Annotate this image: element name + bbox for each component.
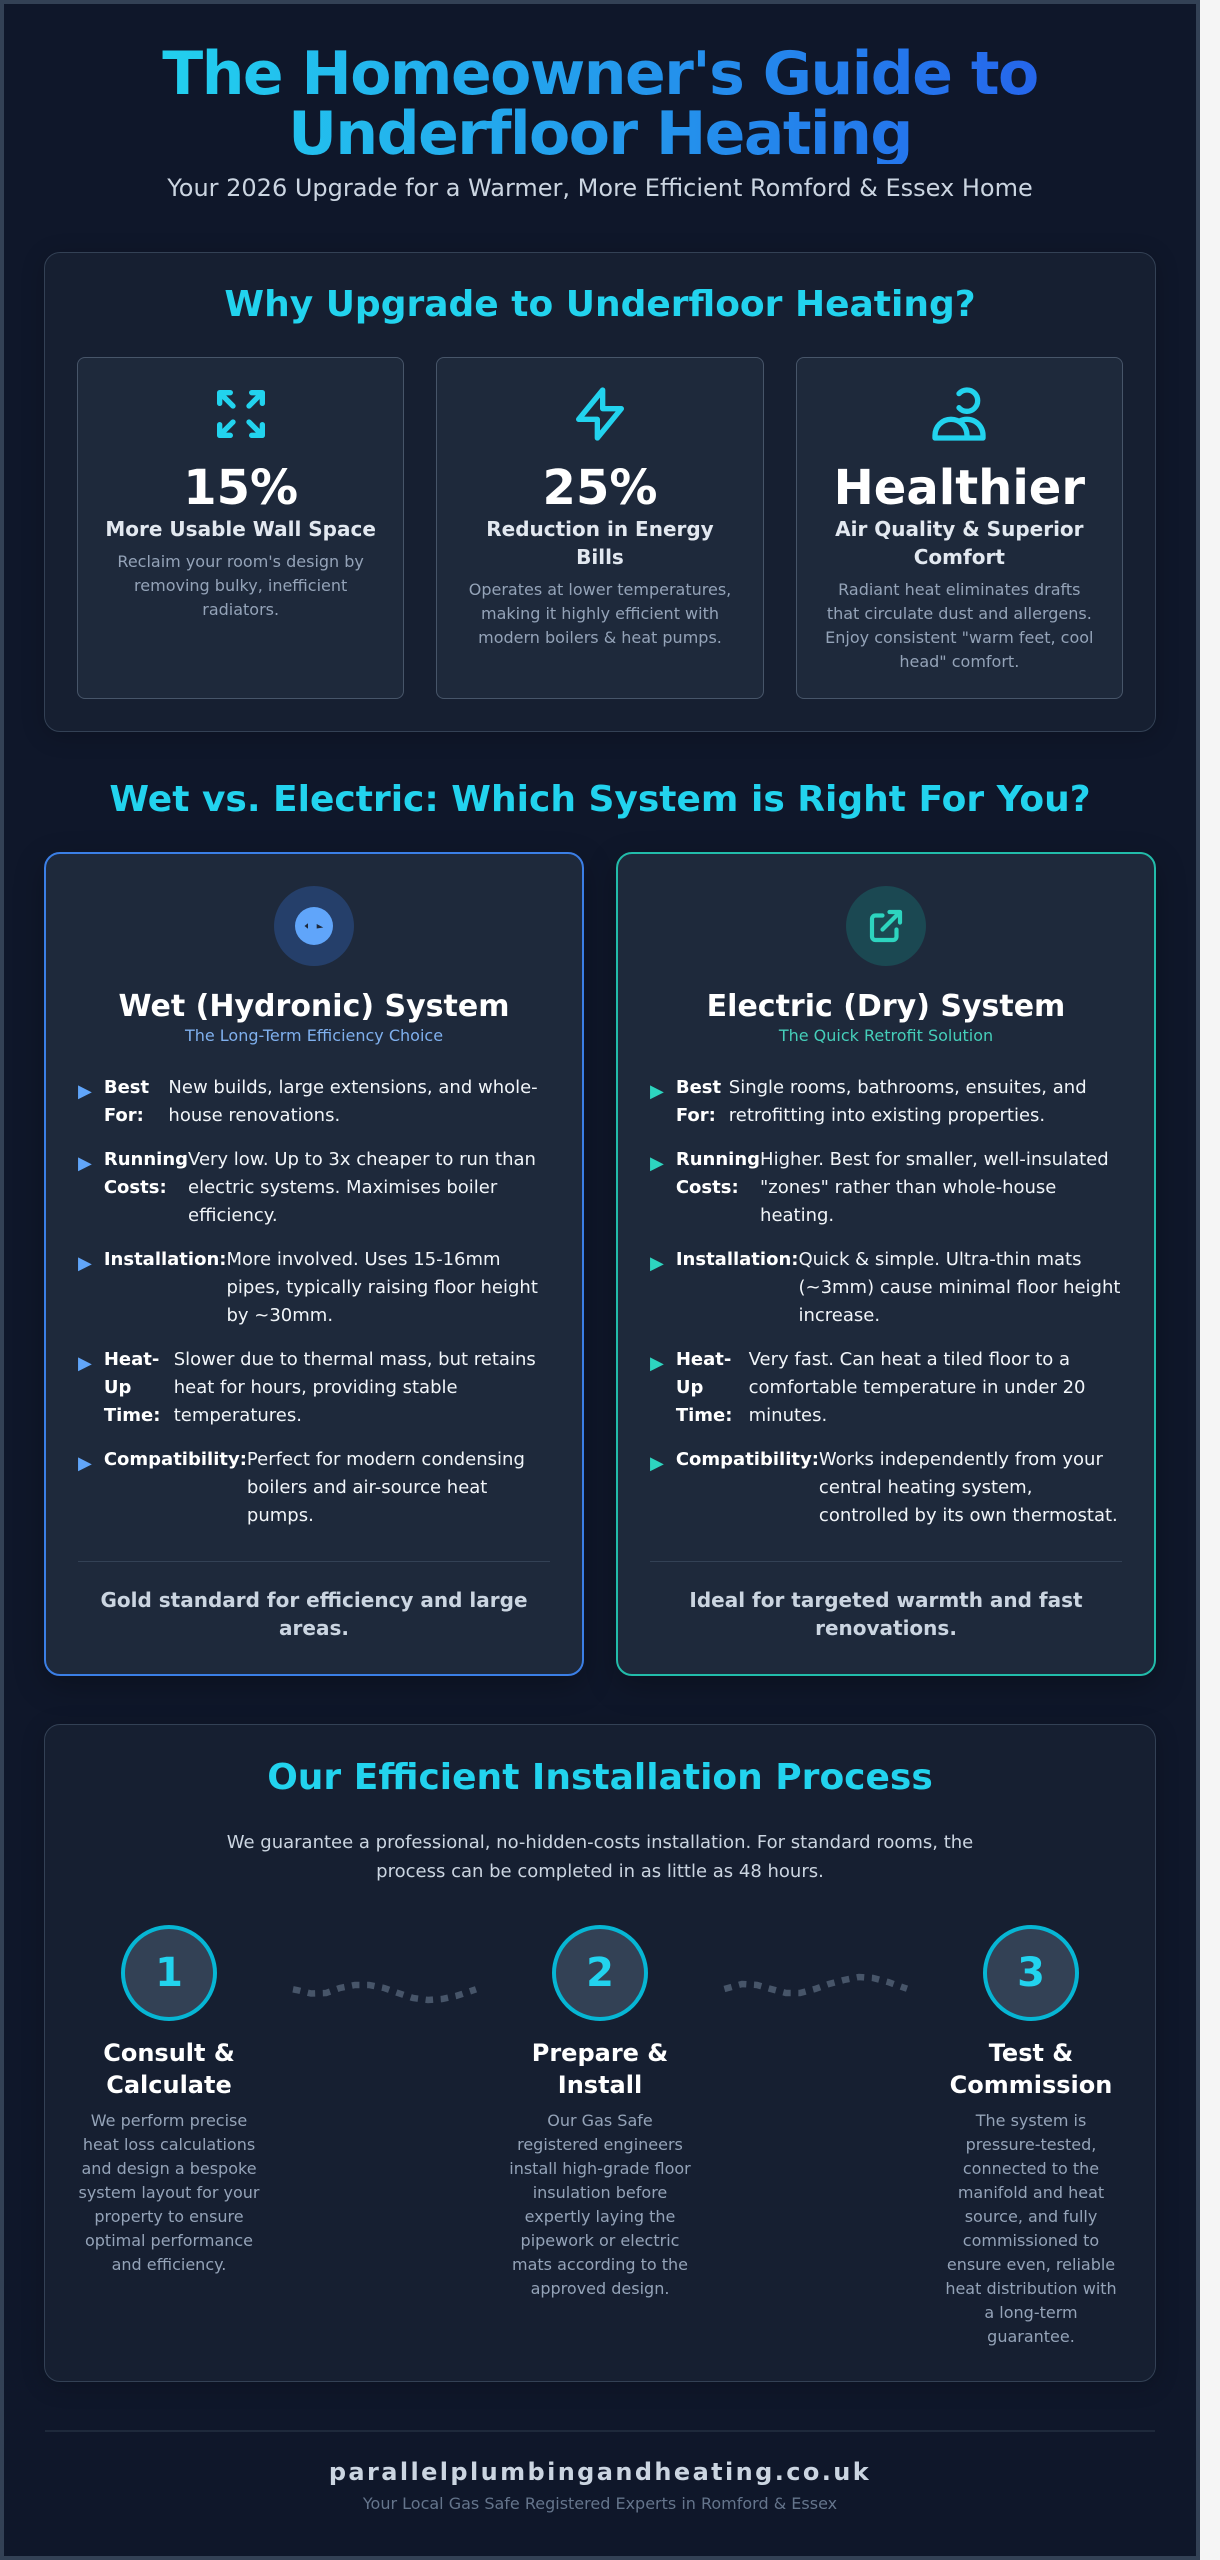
feature list: Higher. Best for smaller, well-insulated "zones" rather than whole-house heating. — [760, 1149, 1109, 1226]
feature list: Running Costs: — [676, 1149, 760, 1198]
feature list: ▶ — [650, 1153, 664, 1174]
feature list: Single rooms, bathrooms, ensuites, and retrofitting into existing properties. — [729, 1077, 1087, 1126]
system name: Electric (Dry) System — [707, 989, 1065, 1024]
verdict: Ideal for targeted warmth and fast renovations. — [689, 1588, 1083, 1640]
step title: Consult & Calculate — [103, 2039, 235, 2099]
feature list: Running Costs: — [104, 1149, 188, 1198]
step description: We perform precise heat loss calculations and design a bespoke system layout for your property to ensure optimal performance and efficiency. — [78, 2111, 260, 2274]
feature list: Quick & simple. Ultra-thin mats (~3mm) cause minimal floor height increase. — [798, 1249, 1120, 1326]
stat value: 25% — [543, 460, 657, 516]
stat label: More Usable Wall Space — [105, 517, 376, 541]
feature list: Heat-Up Time: — [104, 1349, 160, 1426]
feature list: Installation: — [676, 1249, 798, 1270]
feature list: ▶ — [78, 1253, 92, 1274]
feature list: Very fast. Can heat a tiled floor to a comfortable temperature in under 20 minutes. — [749, 1349, 1085, 1426]
step number: 2 — [586, 1950, 614, 1996]
feature list — [78, 1077, 538, 1526]
stat description: Reclaim your room's design by removing bulky, inefficient radiators. — [117, 552, 364, 619]
step description: The system is pressure-tested, connected to the manifold and heat source, and fully commissioned to ensure even, reliable heat distribution with a long-term guarantee. — [945, 2111, 1117, 2346]
system tagline: The Quick Retrofit Solution — [779, 1026, 993, 1045]
panel: wet system — [44, 852, 584, 1676]
feature list: ▶ — [650, 1353, 664, 1374]
verdict: Gold standard for efficiency and large areas. — [100, 1588, 528, 1640]
feature list: ▶ — [650, 1453, 664, 1474]
system name: Wet (Hydronic) System — [119, 989, 509, 1024]
title: The Homeowner's Guide to Underfloor Heating — [162, 39, 1038, 169]
heading: wet vs electric: Wet vs. Electric: Which System is Right For You? — [109, 779, 1091, 820]
step number — [121, 1925, 217, 2021]
footer tagline: Your Local Gas Safe Registered Experts in Romford & Essex — [363, 2494, 837, 2513]
icon: people — [932, 387, 986, 441]
step 2 — [509, 1925, 691, 2298]
process intro: We guarantee a professional, no-hidden-costs installation. For standard rooms, the process can be completed in as little as 48 hours. — [227, 1832, 973, 1882]
feature list: ▶ — [78, 1081, 92, 1102]
card: 25% energy bills — [436, 357, 764, 699]
feature list: Heat-Up Time: — [676, 1349, 732, 1426]
stat description: Radiant heat eliminates drafts that circulate dust and allergens. Enjoy consistent "warm feet, cool head" comfort. — [825, 580, 1093, 671]
feature list: Slower due to thermal mass, but retains heat for hours, providing stable temperatures. — [174, 1349, 536, 1426]
step title: Test & Commission — [950, 2039, 1112, 2099]
icon: wet system — [274, 886, 354, 966]
step number: 3 — [1017, 1950, 1045, 1996]
icon: electric system — [846, 886, 926, 966]
arrow: wavy connector 1 — [292, 1982, 477, 2004]
card: healthier air — [796, 357, 1123, 699]
step description: Our Gas Safe registered engineers install high-grade floor insulation before expertly laying the pipework or electric mats according to the approved design. — [509, 2111, 691, 2298]
feature list: Compatibility: — [104, 1449, 247, 1470]
panel: installation process — [44, 1724, 1156, 2382]
footer website: parallelplumbingandheating.co.uk — [329, 2458, 871, 2486]
feature list: Installation: — [104, 1249, 226, 1270]
feature list: ▶ — [650, 1081, 664, 1102]
feature list: More involved. Uses 15-16mm pipes, typically raising floor height by ~30mm. — [226, 1249, 538, 1326]
arrow: wavy connector 2 — [724, 1974, 908, 1996]
feature list — [650, 1077, 1120, 1526]
feature list: ▶ — [650, 1253, 664, 1274]
heading: installation process: Our Efficient Installation Process — [267, 1757, 933, 1798]
icon: lightning bolt — [576, 387, 624, 441]
subtitle: Your 2026 Upgrade for a Warmer, More Efficient Romford & Essex Home — [167, 174, 1033, 202]
feature list: ▶ — [78, 1353, 92, 1374]
feature list: Very low. Up to 3x cheaper to run than electric systems. Maximises boiler efficiency. — [188, 1149, 536, 1226]
stat description: Operates at lower temperatures, making it highly efficient with modern boilers & heat pumps. — [469, 580, 731, 647]
feature list: Best For: — [676, 1077, 721, 1126]
system tagline: The Long-Term Efficiency Choice — [185, 1026, 443, 1045]
heading: why upgrade: Why Upgrade to Underfloor Heating? — [224, 284, 976, 325]
feature list: ▶ — [78, 1153, 92, 1174]
card: 15% wall space — [77, 357, 404, 699]
stat label: Air Quality & Superior Comfort — [835, 517, 1084, 569]
panel: electric system — [616, 852, 1156, 1676]
stat value: 15% — [183, 460, 298, 516]
step 3 — [945, 1925, 1117, 2346]
step number: 1 — [155, 1950, 183, 1996]
feature list: Best For: — [104, 1077, 149, 1126]
feature list: ▶ — [78, 1453, 92, 1474]
feature list: Compatibility: — [676, 1449, 819, 1470]
feature list: Perfect for modern condensing boilers and air-source heat pumps. — [247, 1449, 525, 1526]
step 1 — [78, 1925, 260, 2274]
icon: expand arrows — [217, 390, 265, 438]
step number — [552, 1925, 648, 2021]
stat value: Healthier — [834, 460, 1085, 516]
step title: Prepare & Install — [532, 2039, 668, 2099]
stat label: Reduction in Energy Bills — [486, 517, 714, 569]
panel: why upgrade — [44, 252, 1156, 732]
feature list: New builds, large extensions, and whole-house renovations. — [168, 1077, 538, 1126]
feature list: Works independently from your central heating system, controlled by its own thermostat. — [819, 1449, 1118, 1526]
step number — [983, 1925, 1079, 2021]
